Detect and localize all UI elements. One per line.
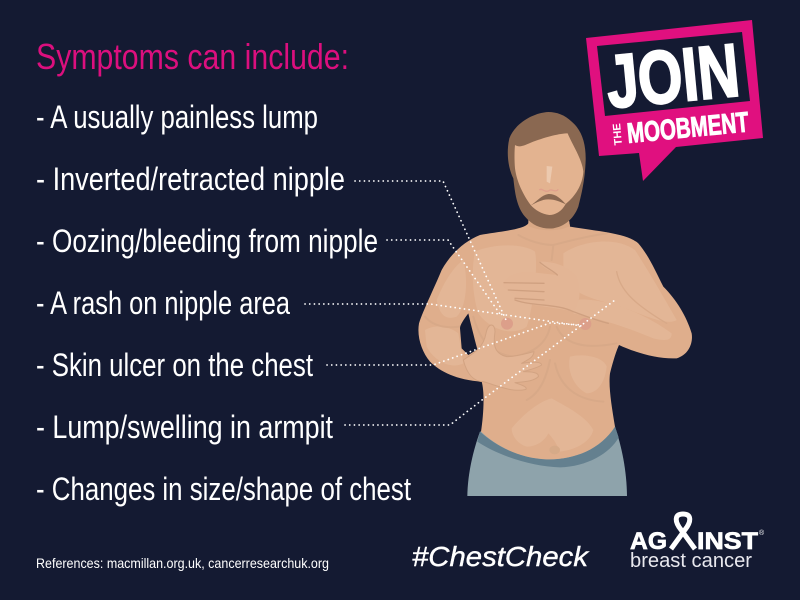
neck shadow — [528, 217, 570, 230]
symptom 2: - Inverted/retracted nipple — [36, 161, 345, 197]
torso and arms — [418, 217, 692, 459]
nostrils — [539, 189, 558, 191]
pointer: inverted nipple — [355, 181, 506, 320]
head — [508, 112, 586, 230]
upper hand on chest — [503, 262, 608, 323]
symptom 1: - A usually painless lump — [36, 99, 318, 135]
symptom 6: - Lump/swelling in armpit — [36, 409, 333, 445]
illustration: man checking chest — [418, 112, 692, 496]
nipple right — [579, 318, 591, 330]
pointer: skin ulcer — [327, 323, 582, 365]
symptom 4: - A rash on nipple area — [36, 285, 290, 321]
pointer: armpit — [345, 300, 615, 425]
symptom 3: - Oozing/bleeding from nipple — [36, 223, 378, 259]
navel — [549, 446, 560, 454]
symptom 7: - Changes in size/shape of chest — [36, 471, 411, 507]
registered mark: ® — [759, 529, 765, 537]
breast cancer: breast cancer — [630, 550, 752, 572]
dotted pointer lines — [305, 181, 615, 425]
INST letters: INST — [697, 528, 758, 555]
muscle shadows — [425, 233, 667, 402]
pointer: oozing — [387, 240, 500, 314]
MOOBMENT: MOOBMENT — [626, 106, 750, 150]
waistband — [477, 427, 619, 467]
dark inner panel — [597, 32, 750, 116]
face — [514, 133, 583, 215]
speech bubble — [586, 20, 763, 181]
nose — [547, 166, 552, 183]
THE: THE — [611, 123, 625, 146]
hashtag: #ChestCheck — [412, 541, 590, 572]
heading: symptoms: Symptoms can include: — [36, 36, 349, 77]
nipple left — [501, 318, 513, 330]
trunks — [467, 427, 627, 496]
symptom 5: - Skin ulcer on the chest — [36, 347, 313, 383]
pointer: rash — [305, 304, 582, 326]
lower hand on stomach — [463, 325, 542, 390]
JOIN: JOIN — [602, 28, 743, 124]
hair and beard — [508, 112, 586, 229]
ribbon icon — [671, 514, 695, 549]
armpit gap — [460, 313, 477, 355]
moustache — [531, 194, 566, 205]
AG letters: AG — [630, 528, 667, 555]
logo: Against Breast Cancer — [630, 514, 765, 572]
badge: Join the Moobment — [586, 20, 763, 181]
references: References: macmillan.org.uk, cancerresearchuk.org — [36, 555, 329, 571]
symptom list — [36, 99, 411, 507]
chest and abdomen highlights — [425, 242, 677, 452]
